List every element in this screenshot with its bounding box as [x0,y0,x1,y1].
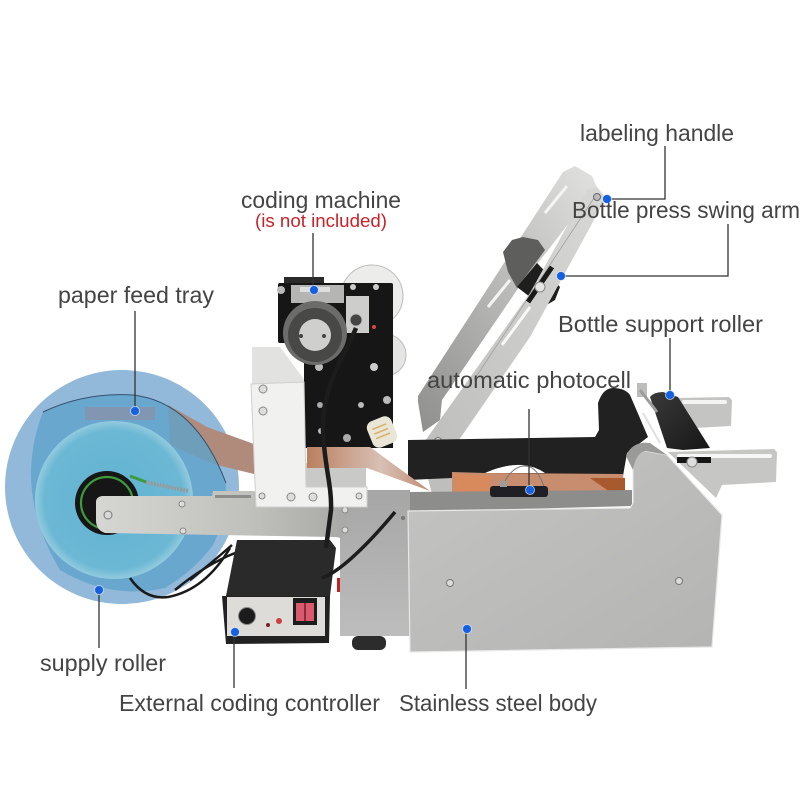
callout: coding machine [241,187,401,294]
bottle support roller [637,383,710,450]
black cable [323,328,356,548]
machine illustration [5,166,777,652]
white mounting bracket [251,382,367,507]
swing arm front plate [420,187,606,494]
rear silver chassis of coder [252,347,306,400]
middle blue disc [31,395,226,591]
callout: stainless steel body: Stainless steel body [399,690,597,716]
silver mounting bar [96,491,350,538]
outer blue disc [5,370,239,604]
callout: paper feed tray [58,282,214,416]
coding controller box [222,540,340,644]
cream print head cylinder [365,414,399,450]
side panel and foot [340,490,410,650]
rear black strip and roller [408,388,648,480]
callout: external coding controller [119,628,380,716]
silver slotted plate rear [677,397,732,428]
disc edge outline [43,395,226,483]
motor on coding machine [283,285,347,365]
callout: external coding controller: External coding controller [119,690,380,716]
callout: labeling handle: labeling handle [580,120,734,146]
swing arm back plate [418,166,597,432]
callout: stainless steel body [399,624,597,716]
callout: automatic photocell [427,367,631,494]
strip of label through disc [85,407,155,420]
upper gray roller [503,237,560,307]
table surface [408,490,632,512]
callout: supply roller [40,586,166,676]
copper label guide plate [307,447,430,491]
second cable [322,512,395,578]
stainless steel body [408,443,722,652]
label paper on tray [168,405,254,474]
callout: supply roller: supply roller [40,650,166,676]
copper label strip [452,472,625,494]
callout: bottle support roller [558,311,763,400]
callout: coding machine: (is not included) [255,211,387,231]
callout: bottle press swing arm: Bottle press swing arm [572,197,800,223]
callout: automatic photocell: automatic photocell [427,367,631,393]
silver slotted plate front [668,449,777,498]
callout: bottle press swing arm [556,197,800,280]
black coding machine panel [277,265,406,448]
photocell sensor [490,466,548,497]
silver base under coder [306,463,366,489]
dark wire loops [130,545,235,597]
callout: bottle support roller: Bottle support roller [558,311,763,337]
inner cyan reel [35,421,193,579]
callout: labeling handle [580,120,734,204]
reel hub [75,471,188,535]
callout: paper feed tray: paper feed tray [58,282,214,308]
callout: coding machine: coding machine [241,187,401,213]
